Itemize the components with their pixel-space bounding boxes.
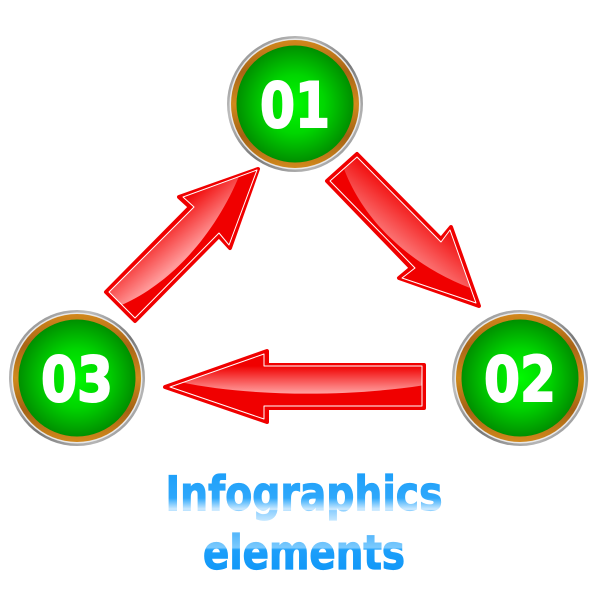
circle 03: 03: [41, 343, 113, 416]
arrow: 01 to 02: [327, 153, 479, 306]
arrow: 03 to 01: [105, 167, 260, 321]
circle 01: 01: [260, 69, 330, 142]
arrow: 02 to 03: [165, 350, 425, 422]
circle 02: [452, 310, 588, 446]
circle 01: [227, 36, 363, 172]
circle 03: [9, 310, 145, 446]
title: Infographics elements: [166, 467, 442, 581]
title: Infographics elements: Infographics: [166, 467, 442, 522]
circle 02: 02: [484, 343, 556, 416]
title: Infographics elements: elements: [203, 526, 405, 581]
